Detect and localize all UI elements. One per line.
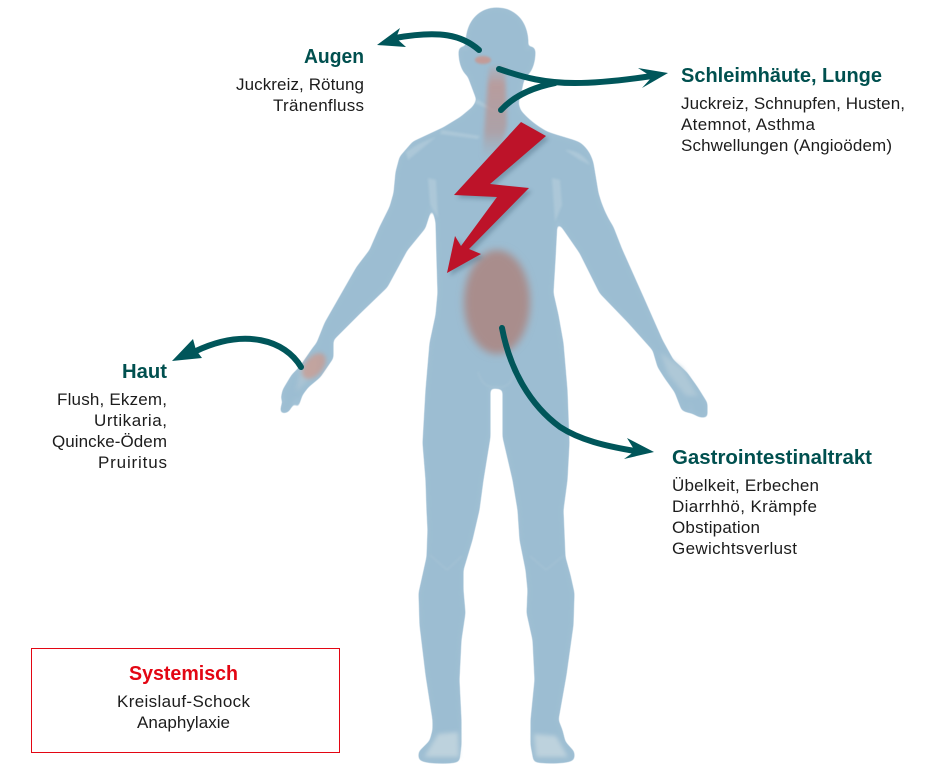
text: Schleimhäute symptoms: Schwellungen (Angioödem)	[681, 136, 892, 155]
knee and groin shading	[430, 372, 563, 570]
panel: Systemisch	[32, 648, 340, 752]
text: Haut symptoms: Quincke-Ödem	[52, 432, 167, 451]
body silhouette	[281, 8, 707, 763]
arrow: Gastrointestinaltrakt	[502, 328, 654, 459]
text: Schleimhäute symptoms: Juckreiz, Schnupfen, Husten,	[681, 94, 905, 113]
feet highlights	[424, 732, 568, 757]
arrow: Schleimhäute, Lunge	[499, 68, 668, 110]
label: Haut	[52, 361, 167, 472]
label: Gastrointestinaltrakt	[672, 447, 872, 558]
box outline	[32, 648, 340, 752]
arrow: Augen	[377, 28, 479, 50]
text: Systemisch symptoms	[117, 692, 250, 732]
text: Augen symptoms	[236, 75, 364, 115]
text: Haut symptoms: Urtikaria,	[94, 411, 167, 430]
text: Augen symptoms: Juckreiz, Rötung	[236, 75, 364, 94]
text: Gastrointestinal symptoms: Gewichtsverlust	[672, 539, 797, 558]
inflammation: abdomen	[464, 250, 530, 354]
text: Systemisch symptoms: Anaphylaxie	[137, 713, 230, 732]
text: Gastrointestinal symptoms: Diarrhhö, Krämpfe	[672, 497, 817, 516]
text: Gastrointestinal symptoms: Übelkeit, Erbechen	[672, 476, 819, 495]
text: Systemisch symptoms: Kreislauf-Schock	[117, 692, 250, 711]
left hand highlight	[296, 355, 318, 392]
inflammation: hand	[297, 349, 331, 383]
text: Schleimhäute symptoms	[681, 94, 905, 155]
text: Haut symptoms: Pruiritus	[98, 453, 167, 472]
text: Augen symptoms: Tränenfluss	[273, 96, 364, 115]
text: Schleimhäute symptoms: Atemnot, Asthma	[681, 115, 816, 134]
heading: Haut: Haut	[122, 361, 167, 383]
lightning bolt arrow	[447, 122, 549, 276]
heading: Systemisch: Systemisch	[129, 663, 238, 685]
text: Haut symptoms: Flush, Ekzem,	[57, 390, 167, 409]
text: Gastrointestinal symptoms: Obstipation	[672, 518, 760, 537]
torso highlights	[406, 99, 590, 222]
label: Augen	[236, 46, 364, 115]
heading: Schleimhäute, Lunge: Schleimhäute, Lunge	[681, 65, 882, 87]
inflammation: eye	[475, 56, 491, 64]
heading: Augen: Augen	[304, 46, 364, 68]
text: Haut symptoms	[52, 390, 167, 472]
label: Schleimhäute, Lunge	[681, 65, 905, 155]
inflammation: throat	[482, 66, 507, 160]
text: Gastrointestinal symptoms	[672, 476, 819, 558]
right hand highlight	[660, 352, 698, 396]
arrow: Haut	[172, 339, 301, 367]
human body figure	[281, 8, 707, 763]
heading: Gastrointestinaltrakt: Gastrointestinaltrakt	[672, 447, 872, 469]
